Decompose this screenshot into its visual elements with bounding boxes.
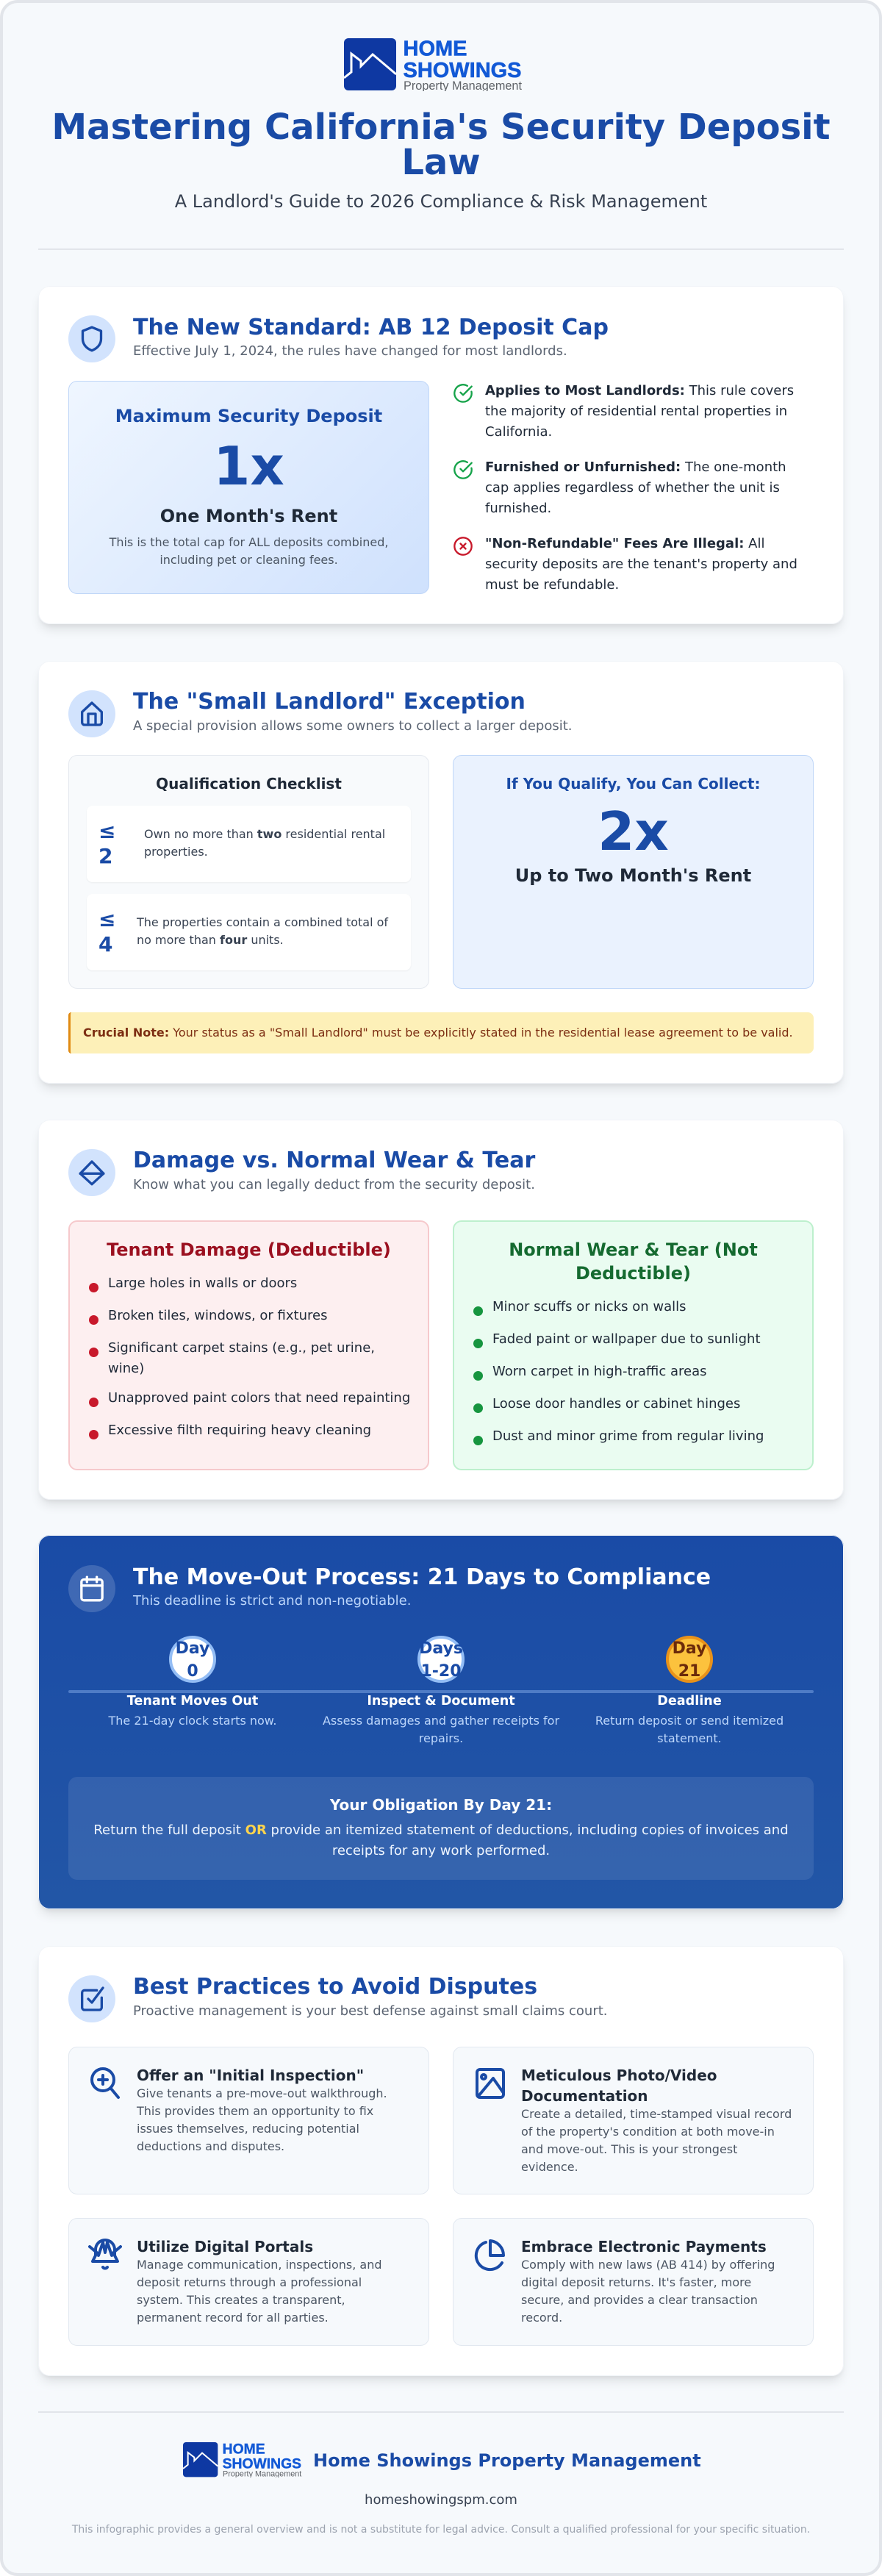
wear title: Normal Wear & Tear (Not	[509, 1239, 758, 1260]
bullet	[473, 1339, 483, 1348]
item: Large holes in walls or doors	[108, 1276, 297, 1291]
step title: Inspect & Document	[367, 1694, 515, 1709]
day badge: 21	[678, 1662, 700, 1681]
subheading: Know what you can legally deduct from the security deposit.	[133, 1177, 535, 1192]
rule: furnished: furnished.	[485, 501, 551, 516]
step text: repairs.	[419, 1731, 463, 1745]
limit two: ≤ 2	[98, 819, 115, 868]
item: Faded paint or wallpaper due to sunlight	[492, 1331, 760, 1347]
item text	[137, 915, 388, 947]
item: wine)	[108, 1361, 144, 1376]
title: Law	[401, 142, 481, 183]
subheading: Proactive management is your best defense against small claims court.	[133, 2003, 608, 2019]
header logo: SHOWINGS	[403, 59, 522, 82]
deposit note	[109, 535, 388, 567]
icon: check square	[68, 1975, 115, 2022]
step: day 21	[595, 1636, 784, 1745]
title: Mastering California's Security Deposit	[51, 107, 831, 148]
subheading: This deadline is strict and non-negotiable.	[133, 1593, 411, 1609]
tip title: Meticulous Photo/Video	[521, 2067, 717, 2084]
bullet	[473, 1403, 483, 1413]
collect meaning: Up to Two Month's Rent	[515, 865, 751, 886]
icon: check	[453, 384, 473, 403]
tip text	[137, 2258, 382, 2325]
rule: non-refundable	[485, 536, 797, 593]
heading: The "Small Landlord" Exception	[133, 689, 526, 715]
callout: crucial note	[68, 1012, 814, 1053]
bullet	[89, 1430, 98, 1439]
subheading: Effective July 1, 2024, the rules have changed for most landlords.	[133, 343, 567, 359]
bullet	[89, 1398, 98, 1407]
bullet	[473, 1306, 483, 1316]
title	[51, 107, 831, 183]
step text	[595, 1714, 784, 1745]
wear list	[473, 1299, 764, 1445]
day badge: 0	[187, 1662, 198, 1681]
step text	[323, 1714, 560, 1745]
heading: The Move-Out Process: 21 Days to Compliance	[133, 1564, 711, 1590]
item text: no more than four units.	[137, 933, 284, 947]
footer logo: HOME	[223, 2442, 265, 2458]
collect label: If You Qualify, You Can Collect:	[506, 775, 760, 793]
day badge	[417, 1636, 465, 1683]
day badge: 1-20	[420, 1662, 462, 1681]
footer company name: Home Showings Property Management	[313, 2450, 701, 2471]
checklist item two	[87, 894, 411, 970]
tip title: Offer an "Initial Inspection"	[137, 2067, 364, 2084]
tip text: and move-out. This is your strongest	[521, 2142, 737, 2156]
icon: bell	[88, 2239, 122, 2270]
item text	[144, 827, 385, 859]
icon: check	[453, 460, 473, 479]
tip text	[137, 2086, 387, 2153]
panel: normal wear	[453, 1220, 814, 1470]
icon: image	[476, 2068, 506, 2099]
item: Excessive filth requiring heavy cleaning	[108, 1423, 371, 1438]
tip text	[521, 2258, 775, 2325]
item: Broken tiles, windows, or fixtures	[108, 1308, 327, 1323]
panel: tenant damage	[68, 1220, 429, 1470]
damage list	[89, 1276, 410, 1439]
tip title	[521, 2067, 717, 2105]
damage title: Tenant Damage (Deductible)	[107, 1239, 391, 1260]
item: Loose door handles or cabinet hinges	[492, 1396, 740, 1412]
checklist item one	[87, 806, 411, 882]
tip text: deposit returns through a professional	[137, 2275, 362, 2289]
panel: best practices	[38, 1946, 844, 2376]
icon: shield	[68, 315, 115, 362]
icon: diamond scale	[68, 1149, 115, 1196]
step: day 0	[108, 1636, 276, 1728]
icon: cross	[453, 537, 473, 556]
step text: Assess damages and gather receipts for	[323, 1714, 559, 1728]
timeline line	[68, 1690, 814, 1693]
limit four: ≤ 4	[98, 907, 115, 956]
bullet	[89, 1315, 98, 1325]
deposit note: including pet or cleaning fees.	[159, 553, 338, 567]
day badge: Day	[176, 1639, 209, 1658]
day badge	[169, 1636, 216, 1683]
day badge: Days	[419, 1639, 463, 1658]
item: Dust and minor grime from regular living	[492, 1428, 764, 1444]
icon: magnifier	[90, 2067, 121, 2100]
tip text: Give tenants a pre-move-out walkthrough.	[137, 2086, 387, 2100]
tip text: Comply with new laws (AB 414) by offering	[521, 2258, 775, 2272]
step title: Tenant Moves Out	[127, 1694, 258, 1709]
day badge	[666, 1636, 713, 1683]
tip title: Documentation	[521, 2087, 648, 2105]
tip text: of the property's condition at both move-in	[521, 2125, 775, 2139]
panel: damage vs wear and tear	[38, 1120, 844, 1500]
rule: furnished	[485, 459, 786, 516]
rule: non-refundable: security deposits are the tenant's property and	[485, 557, 797, 572]
footer logo: SHOWINGS	[223, 2456, 301, 2472]
tip text	[521, 2107, 792, 2174]
panel: the new standard	[38, 286, 844, 624]
deposit meaning: One Month's Rent	[160, 506, 337, 526]
tip text: permanent record for all parties.	[137, 2311, 329, 2325]
panel: maximum deposit	[68, 381, 429, 594]
heading: The New Standard: AB 12 Deposit Cap	[133, 315, 609, 340]
rule: most landlords: the majority of residential rental properties in	[485, 404, 787, 419]
tip: digital portals	[68, 2218, 429, 2346]
rule: furnished: Furnished or Unfurnished: The one-month	[485, 459, 786, 475]
wear title: Deductible)	[576, 1263, 691, 1284]
tip: photo documentation	[453, 2047, 814, 2194]
tip text: system. This creates a transparent,	[137, 2293, 345, 2307]
panel: small landlord exception	[38, 661, 844, 1084]
collect multiple: 2x	[598, 801, 669, 862]
bullet	[473, 1436, 483, 1445]
obligation title: Your Obligation By Day 21:	[330, 1796, 552, 1814]
rule: most landlords: Applies to Most Landlords: This rule covers	[485, 383, 794, 398]
icon: calendar	[68, 1565, 115, 1612]
rule: furnished: cap applies regardless of whether the unit is	[485, 480, 780, 495]
rule: most landlords	[485, 383, 794, 440]
heading: Damage vs. Normal Wear & Tear	[133, 1148, 535, 1173]
item: Unapproved paint colors that need repainting	[108, 1390, 410, 1406]
obligation text: receipts for any work performed.	[332, 1843, 550, 1858]
item text: properties.	[144, 845, 208, 859]
tip text: Create a detailed, time-stamped visual record	[521, 2107, 792, 2121]
rule: non-refundable: must be refundable.	[485, 577, 619, 593]
icon: house	[68, 690, 115, 737]
tip: initial inspection	[68, 2047, 429, 2194]
deposit multiple: 1x	[213, 435, 284, 497]
panel: collectable amount	[453, 755, 814, 989]
tip text: evidence.	[521, 2160, 578, 2174]
bullet	[89, 1348, 98, 1357]
obligation text: Return the full deposit OR provide an itemized statement of deductions, including copies of invoices and	[93, 1822, 789, 1838]
footer website: homeshowingspm.com	[365, 2492, 517, 2508]
item text: Own no more than two residential rental	[144, 827, 385, 841]
item: Worn carpet in high-traffic areas	[492, 1364, 706, 1379]
tip text: record.	[521, 2311, 562, 2325]
step text: Return deposit or send itemized	[595, 1714, 784, 1728]
step text: The 21-day clock starts now.	[109, 1714, 276, 1728]
item: Minor scuffs or nicks on walls	[492, 1299, 686, 1314]
obligation text	[93, 1822, 789, 1858]
bullet	[473, 1371, 483, 1381]
note text: Crucial Note: Your status as a "Small Landlord" must be explicitly stated in the residential lease agreement to be valid.	[83, 1026, 793, 1040]
step: days 1-20	[323, 1636, 560, 1745]
tip title: Embrace Electronic Payments	[521, 2238, 767, 2255]
tip text: Manage communication, inspections, and	[137, 2258, 382, 2272]
step title: Deadline	[657, 1694, 722, 1709]
item text: The properties contain a combined total of	[137, 915, 388, 929]
subtitle: A Landlord's Guide to 2026 Compliance & Risk Management	[175, 191, 707, 212]
tip text: digital deposit returns. It's faster, more	[521, 2275, 751, 2289]
heading: Best Practices to Avoid Disputes	[133, 1974, 537, 2000]
footer divider	[38, 2411, 844, 2413]
callout: obligation	[68, 1777, 814, 1880]
subheading: A special provision allows some owners to collect a larger deposit.	[133, 718, 573, 734]
header divider	[38, 248, 844, 250]
tip text: This provides them an opportunity to fix	[137, 2104, 373, 2118]
header logo	[344, 38, 522, 91]
tip: electronic payments	[453, 2218, 814, 2346]
deposit label: Maximum Security Deposit	[115, 406, 382, 426]
tip text: issues themselves, reducing potential	[137, 2122, 359, 2136]
footer disclaimer: This infographic provides a general overview and is not a substitute for legal advice. Consult a qualified professional for your specific situation.	[72, 2524, 810, 2536]
tip text: secure, and provides a clear transaction	[521, 2293, 758, 2307]
panel: qualification checklist	[68, 755, 429, 989]
tip title: Utilize Digital Portals	[137, 2238, 313, 2255]
item: Significant carpet stains (e.g., pet urine,	[108, 1340, 375, 1356]
wear title	[509, 1239, 758, 1284]
key rules list	[453, 383, 797, 593]
rule: non-refundable: "Non-Refundable" Fees Are Illegal: All	[485, 536, 764, 551]
deposit note: This is the total cap for ALL deposits combined,	[110, 535, 388, 549]
rule: most landlords: California.	[485, 424, 552, 440]
checklist title: Qualification Checklist	[156, 775, 342, 793]
tip text: deductions and disputes.	[137, 2139, 284, 2153]
bullet	[89, 1283, 98, 1292]
step text: statement.	[657, 1731, 722, 1745]
icon: pie chart	[475, 2239, 505, 2272]
item	[108, 1340, 375, 1376]
panel: move-out process	[38, 1535, 844, 1909]
footer logo	[182, 2442, 302, 2477]
day badge: Day	[673, 1639, 706, 1658]
